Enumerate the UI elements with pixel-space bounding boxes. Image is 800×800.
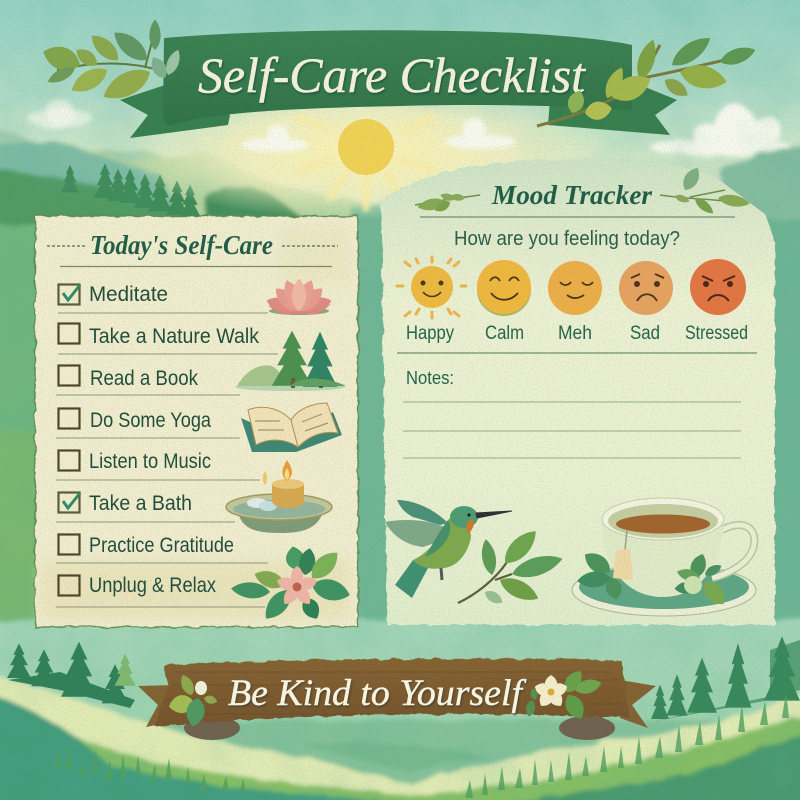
leaves: title right branch [537,31,758,126]
icon: open book [241,403,342,452]
icon: meh face [548,261,602,315]
item: take a nature walk: Take a Nature Walk [89,325,259,348]
item: read a book: Read a Book [90,367,198,390]
item: do some yoga: Do Some Yoga [90,409,211,432]
icon: happy face [397,257,466,318]
icon: pine trees [235,331,346,391]
paper [35,216,358,627]
icon: leaf sprig [458,525,565,607]
cup handle [712,525,754,578]
leaves: right of heading [660,165,751,217]
flower and leaves: sign right [525,667,603,723]
icon: stressed face [690,259,746,315]
bird body [413,516,471,569]
mood labels: Calm [485,323,524,344]
sign tail right [620,680,656,728]
sign tail left [138,685,180,727]
heading: Today's Self-Care [90,230,273,260]
wooden sign [138,659,656,740]
item: practice gratitude: Practice Gratitude [89,534,234,557]
item: listen to music: Listen to Music [89,450,211,473]
bird lower wing [385,520,444,547]
ribbon tail left [120,85,230,138]
mood labels: Stressed [685,323,748,344]
notes lines [403,402,741,458]
prompt: How are you feeling today? [454,228,680,250]
icon: sun [300,118,432,208]
bird tail [395,560,428,598]
item: unplug and relax: Unplug & Relax [89,574,216,597]
cup body [601,518,723,597]
title text: Self-Care Checklist [198,47,586,103]
mood labels: Meh [558,323,592,344]
saucer [572,564,756,616]
panel: today's self-care checklist [35,216,358,627]
leaves and blossom on saucer [576,548,730,610]
item: take a bath: Take a Bath [89,492,192,515]
item: read a book [58,366,198,390]
icon: hummingbird [385,500,512,598]
panel: mood tracker [381,160,775,625]
leaves: left of heading [415,192,480,214]
notes label: Notes: [406,368,454,388]
mood labels: Sad [630,323,660,344]
icon: tea cup and saucer [572,498,756,616]
icon: candle bowl [226,460,332,533]
sign stumps [184,716,615,740]
ribbon band [163,30,632,125]
item: do some yoga [58,408,211,432]
meadow trees and grass [7,636,800,798]
icon: calm face [477,260,531,316]
ribbon tail right [548,85,677,135]
title ribbon [120,30,677,138]
sign text: Be Kind to Yourself [228,673,527,714]
tea tag [613,549,633,580]
mood labels: Happy [406,323,454,344]
paper [381,160,775,625]
icon: lotus [264,277,334,318]
heading: Mood Tracker [491,180,652,210]
bird upper wing [397,500,448,525]
mood labels [406,323,748,344]
leaves: sign left [167,673,218,728]
sign plank [155,659,630,727]
icon: flower with leaves [230,545,352,624]
icon: sad face [619,261,673,315]
leaves: title left branch [39,19,183,107]
item: meditate: Meditate [89,283,168,306]
